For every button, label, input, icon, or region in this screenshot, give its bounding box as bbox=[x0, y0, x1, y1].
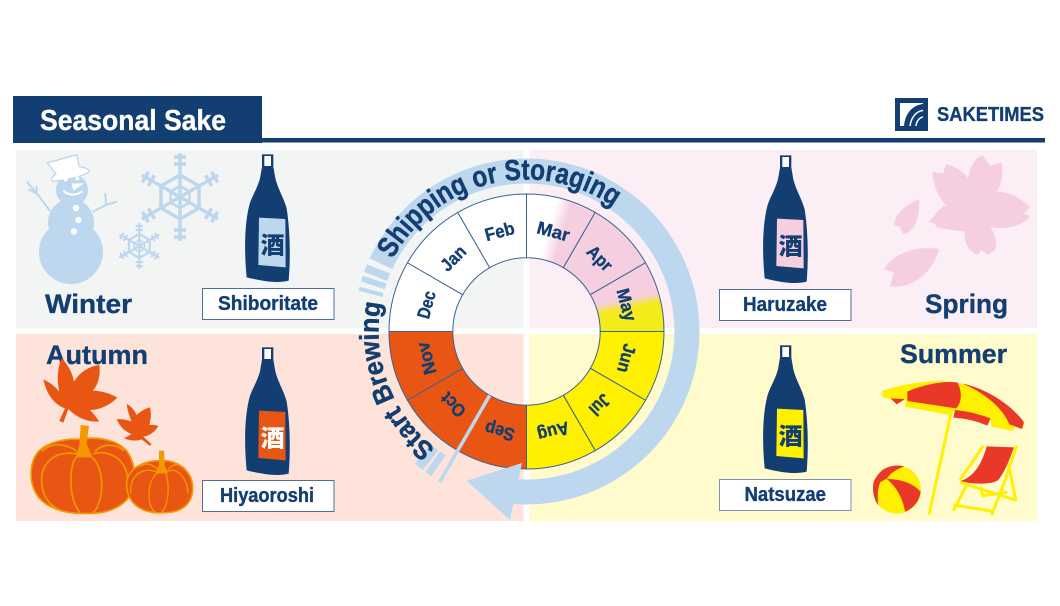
title banner bbox=[13, 96, 1045, 143]
label: Haruzake: Haruzake bbox=[743, 294, 827, 316]
wheel segments bbox=[389, 194, 664, 469]
panel: autumn background bbox=[16, 334, 524, 521]
icon: cherry blossom bbox=[884, 156, 1030, 287]
label: Shiboritate bbox=[202, 288, 334, 320]
panel: summer background bbox=[530, 334, 1037, 521]
heading: Summer: Summer bbox=[900, 339, 1007, 369]
month labels: Sep bbox=[483, 418, 517, 445]
curved label: Shipping or Storaging: Shipping or Storaging bbox=[378, 160, 621, 257]
month labels: Oct bbox=[437, 388, 470, 421]
month labels: Mar bbox=[535, 218, 572, 245]
icon: autumn bottle: 酒 bbox=[261, 418, 285, 453]
icon: beach umbrella, ball and chair bbox=[873, 381, 1024, 515]
panel: winter background bbox=[16, 150, 524, 328]
month labels: May bbox=[613, 286, 640, 323]
icon: snowman bbox=[27, 155, 117, 284]
month labels: Dec bbox=[413, 289, 440, 321]
label: Natsuzae: Natsuzae bbox=[744, 484, 826, 506]
month labels: Nov bbox=[413, 340, 440, 377]
heading: Spring: Spring bbox=[925, 289, 1008, 319]
icon: spring bottle bbox=[763, 155, 808, 283]
arrow: shipping cycle band bbox=[359, 171, 687, 492]
start brewing marker line bbox=[440, 395, 490, 482]
logo: SAKETIMES: SAKETIMES bbox=[937, 104, 1044, 126]
label: Hiyaoroshi: Hiyaoroshi bbox=[220, 485, 314, 507]
arrow head bbox=[467, 463, 522, 520]
icon: summer bottle: 酒 bbox=[779, 416, 803, 451]
label: Hiyaoroshi bbox=[202, 480, 334, 512]
heading: Winter: Winter bbox=[45, 289, 133, 319]
curved label: Start Brewing: Start Brewing bbox=[358, 302, 433, 460]
chart: sake brewing calendar wheel bbox=[358, 158, 700, 520]
month labels: Aug bbox=[535, 418, 571, 445]
icon: pumpkins bbox=[31, 425, 193, 513]
month labels bbox=[413, 218, 640, 445]
label: Haruzake bbox=[720, 290, 851, 320]
month labels: Feb bbox=[483, 218, 517, 245]
icon: summer bottle bbox=[763, 345, 808, 473]
logo: SAKETIMES bbox=[895, 98, 1044, 131]
icon: large snowflake bbox=[139, 153, 221, 241]
month labels: Apr bbox=[583, 241, 617, 275]
icon: winter bottle: 酒 bbox=[261, 225, 285, 260]
icon: autumn bottle bbox=[245, 347, 290, 475]
label: Shiboritate: Shiboritate bbox=[218, 293, 318, 315]
icon: winter bottle bbox=[245, 154, 290, 282]
month labels: Jul bbox=[585, 390, 615, 420]
month labels: Jan bbox=[436, 241, 470, 275]
icon: autumn leaves bbox=[43, 358, 158, 446]
icon: small snowflake bbox=[118, 223, 161, 269]
icon: spring bottle: 酒 bbox=[779, 226, 803, 261]
label: Natsuzae bbox=[720, 480, 851, 510]
panel: spring background bbox=[530, 150, 1037, 328]
title banner: Seasonal Sake bbox=[40, 105, 226, 137]
month labels: Jun bbox=[613, 342, 640, 375]
heading: Autumn: Autumn bbox=[46, 340, 148, 370]
